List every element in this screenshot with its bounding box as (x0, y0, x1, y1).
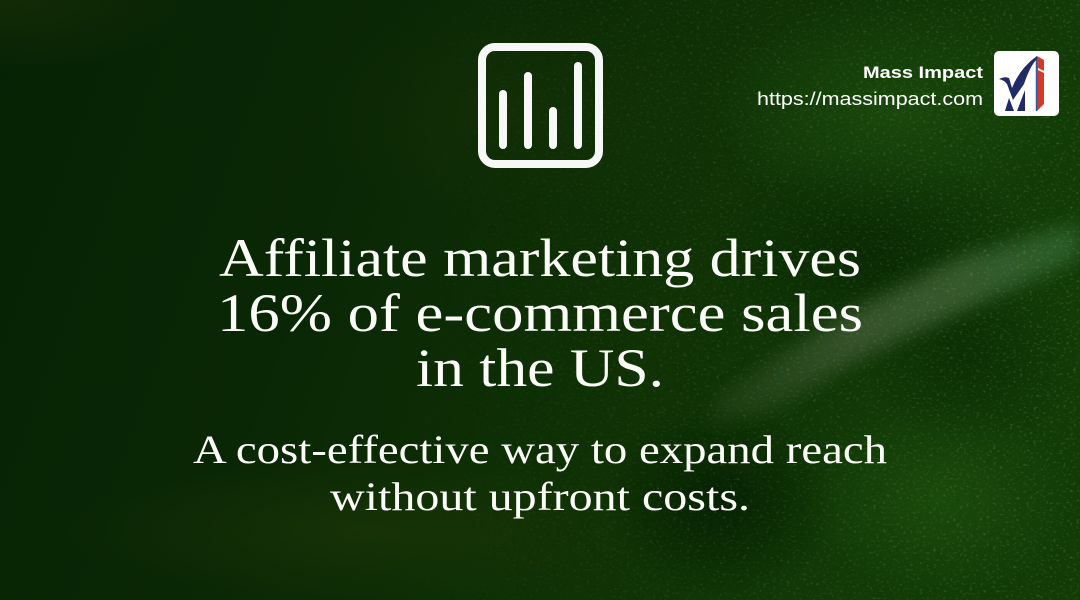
brand name and URL: Mass Impact (863, 63, 983, 82)
brand name and URL (757, 63, 983, 109)
title (217, 228, 863, 398)
logo (994, 51, 1059, 116)
title: 16% of e-commerce sales (217, 283, 863, 343)
subtitle: A cost-effective way to expand reach (193, 427, 887, 472)
brand name and URL: https://massimpact.com (757, 89, 983, 109)
subtitle: without upfront costs. (330, 474, 750, 519)
title: in the US. (416, 338, 664, 398)
subtitle (193, 427, 887, 519)
icon: bar chart in rounded square (482, 47, 599, 164)
title: Affiliate marketing drives (219, 228, 861, 288)
